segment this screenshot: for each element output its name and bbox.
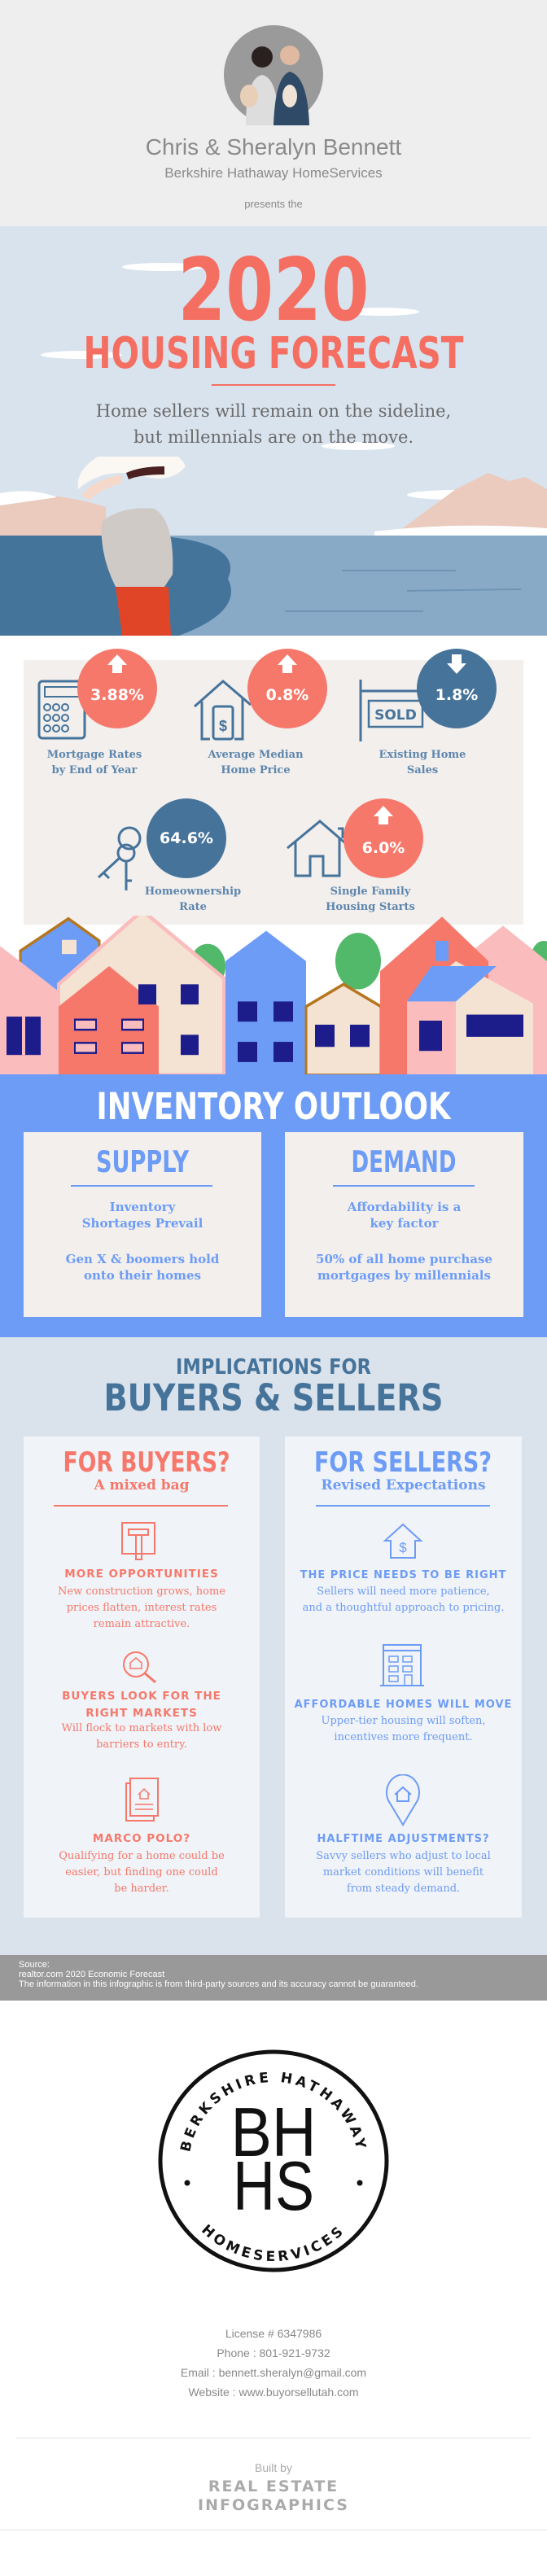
- hero section: [0, 226, 547, 636]
- contact info: [0, 2324, 547, 2402]
- stat: mortgage rates: [37, 649, 157, 739]
- built by credit: [0, 2460, 547, 2515]
- badge: 0.8% up: 0.8%: [266, 686, 309, 704]
- title block: [83, 239, 464, 386]
- item: right markets: [62, 1690, 221, 1720]
- illustration: seaside with woman: [0, 457, 547, 636]
- panel: demand: 50% of all home purchase: [316, 1252, 492, 1266]
- label: median price: [208, 749, 304, 776]
- panel: for sellers: market conditions will benefit: [323, 1866, 484, 1878]
- label: homeownership: Homeownership: [145, 886, 241, 898]
- panel: supply: [24, 1132, 261, 1317]
- icon: house dollar: $: [399, 1540, 407, 1555]
- label: housing starts: [326, 886, 415, 913]
- icon: location pin: [384, 1774, 422, 1826]
- item: marco polo: MARCO POLO?: [93, 1832, 190, 1845]
- panel: demand: [285, 1132, 523, 1317]
- subtitle: [96, 401, 451, 447]
- logo: BHHS: [155, 2047, 392, 2275]
- item: halftime: HALFTIME ADJUSTMENTS?: [317, 1833, 490, 1845]
- source bar: [0, 1955, 547, 2001]
- demand text: Affordability is a: [348, 1200, 461, 1214]
- source bar: realtor.com 2020 Economic Forecast: [19, 1970, 164, 1979]
- panel: supply: Gen X & boomers hold: [66, 1252, 219, 1266]
- panel: for sellers: Sellers will need more patience,: [317, 1585, 490, 1598]
- subtitle: Home sellers will remain on the sideline,: [96, 401, 451, 421]
- badge: 3.88% up: [77, 649, 157, 728]
- header panel: [0, 0, 547, 226]
- label: housing starts: Housing Starts: [326, 901, 415, 913]
- panel: for sellers: incentives more frequent.: [334, 1731, 473, 1743]
- item: right markets: BUYERS LOOK FOR THE: [62, 1690, 221, 1703]
- icon: document house: [125, 1778, 159, 1822]
- panel: for buyers: be harder.: [114, 1883, 169, 1895]
- company name: Berkshire Hathaway HomeServices: [164, 165, 383, 181]
- icon: house with tag: $: [219, 718, 227, 734]
- label: homeownership: Rate: [179, 901, 207, 913]
- implications section: [0, 1337, 547, 1955]
- icon: magnifier house: [123, 1651, 156, 1683]
- implications heading: [104, 1354, 443, 1419]
- badge: 6.0% up: [344, 798, 423, 878]
- label: existing sales: [379, 749, 466, 776]
- contact info: Email : bennett.sheralyn@gmail.com: [181, 2366, 366, 2379]
- panel: for buyers: easier, but finding one could: [65, 1866, 218, 1878]
- label: mortgage rates: Mortgage Rates: [47, 749, 142, 761]
- illustration: row of houses: [0, 916, 547, 1074]
- panel: for buyers: prices flatten, interest rates: [67, 1602, 217, 1614]
- label: mortgage rates: [47, 749, 142, 776]
- built by credit: Built by: [255, 2461, 292, 2474]
- stat: median price: [194, 649, 327, 741]
- contact info: Website : www.buyorsellutah.com: [188, 2386, 359, 2399]
- title: 2020: 2020: [177, 239, 370, 340]
- panel: for buyers: New construction grows, home: [58, 1585, 225, 1598]
- contact info: License # 6347986: [225, 2327, 322, 2340]
- stat: homeownership: [98, 798, 226, 890]
- panel: supply: onto their homes: [84, 1268, 201, 1283]
- badge: 64.6%: 64.6%: [160, 829, 213, 847]
- built by credit: INFOGRAPHICS: [198, 2496, 349, 2514]
- badge: 1.8% down: 1.8%: [435, 686, 478, 704]
- supply text: [82, 1200, 203, 1231]
- label: mortgage rates: by End of Year: [52, 764, 137, 776]
- stat: existing sales: [360, 649, 497, 741]
- item: more opportunities: MORE OPPORTUNITIES: [64, 1568, 219, 1581]
- supply text: Inventory: [110, 1200, 175, 1214]
- stats panel: [24, 660, 523, 925]
- badge: 64.6%: [147, 798, 226, 878]
- panel: for buyers: Qualifying for a home could be: [59, 1850, 225, 1862]
- logo: BHHS: BERKSHIRE HATHAWAY: [180, 2072, 366, 2152]
- contact info: Phone : 801-921-9732: [217, 2346, 330, 2360]
- title: housing forecast: HOUSING FORECAST: [83, 328, 464, 379]
- panel: for sellers: Upper-tier housing will soften,: [321, 1715, 485, 1727]
- icon: house outline: [287, 820, 344, 877]
- icon: building: [380, 1644, 424, 1686]
- label: housing starts: Single Family: [330, 886, 410, 898]
- supply text: Shortages Prevail: [82, 1216, 203, 1231]
- icon: keys: [98, 827, 142, 890]
- label: homeownership: [145, 886, 241, 913]
- label: median price: Home Price: [221, 764, 291, 776]
- icon: sold sign: SOLD: [374, 707, 417, 724]
- panel: for buyers: Will flock to markets with low: [62, 1722, 221, 1734]
- heading: supply: SUPPLY: [96, 1146, 190, 1179]
- label: median price: Average Median: [208, 749, 304, 761]
- icon: house dollar: [383, 1524, 423, 1559]
- panel: for sellers: from steady demand.: [347, 1883, 460, 1895]
- panel: for sellers: [285, 1437, 522, 1918]
- label: existing sales: Sales: [407, 764, 438, 776]
- badge: 3.88% up: 3.88%: [90, 686, 144, 704]
- badge: 6.0% up: 6.0%: [362, 839, 405, 857]
- built by credit: REAL ESTATE: [208, 2478, 339, 2495]
- panel: for buyers: [24, 1437, 260, 1918]
- source bar: Source:: [19, 1960, 50, 1970]
- panel: for buyers: barriers to entry.: [96, 1738, 187, 1751]
- logo: BHHS: HOMESERVICES: [202, 2224, 342, 2261]
- inventory outlook section: [0, 1074, 547, 1337]
- icon: calculator: [37, 680, 86, 739]
- heading: inventory outlook: INVENTORY OUTLOOK: [96, 1085, 452, 1128]
- item: price right: THE PRICE NEEDS TO BE RIGHT: [300, 1569, 506, 1581]
- icon: house with tag: [194, 680, 251, 741]
- demand text: [347, 1200, 461, 1231]
- clouds: [41, 263, 454, 500]
- demand text: key factor: [370, 1216, 439, 1231]
- panel: for sellers: Savvy sellers who adjust to local: [316, 1850, 491, 1862]
- agent photo: [224, 25, 323, 125]
- logo: BHHS: BH: [231, 2094, 316, 2171]
- badge: 1.8% down: [417, 649, 497, 728]
- item: affordable homes: AFFORDABLE HOMES WILL MOVE: [295, 1699, 512, 1711]
- implications heading: BUYERS & SELLERS: [104, 1376, 443, 1419]
- logo: BHHS: HS: [233, 2148, 314, 2225]
- panel: for sellers: and a thoughtful approach to pricing.: [303, 1602, 504, 1614]
- item: right markets: RIGHT MARKETS: [85, 1707, 198, 1720]
- stat: housing starts: [287, 798, 423, 878]
- icon: sold sign: [360, 680, 423, 741]
- icon: blueprint hammer: [121, 1522, 155, 1560]
- panel: for sellers: Revised Expectations: [321, 1477, 486, 1494]
- heading: demand: DEMAND: [352, 1146, 456, 1179]
- subtitle: but millennials are on the move.: [133, 427, 414, 447]
- badge: 0.8% up: [247, 649, 327, 728]
- source bar: The information in this infographic is from third-party sources and its accuracy cannot be guaranteed.: [19, 1979, 418, 1989]
- presents text: presents the: [244, 198, 303, 210]
- implications heading: IMPLICATIONS FOR: [176, 1354, 371, 1380]
- agent name: Chris & Sheralyn Bennett: [146, 134, 401, 160]
- woman: [102, 508, 173, 587]
- panel: for buyers: remain attractive.: [94, 1618, 190, 1630]
- panel: for buyers: A mixed bag: [94, 1477, 190, 1494]
- panel: demand: mortgages by millennials: [317, 1268, 491, 1283]
- label: existing sales: Existing Home: [379, 749, 466, 761]
